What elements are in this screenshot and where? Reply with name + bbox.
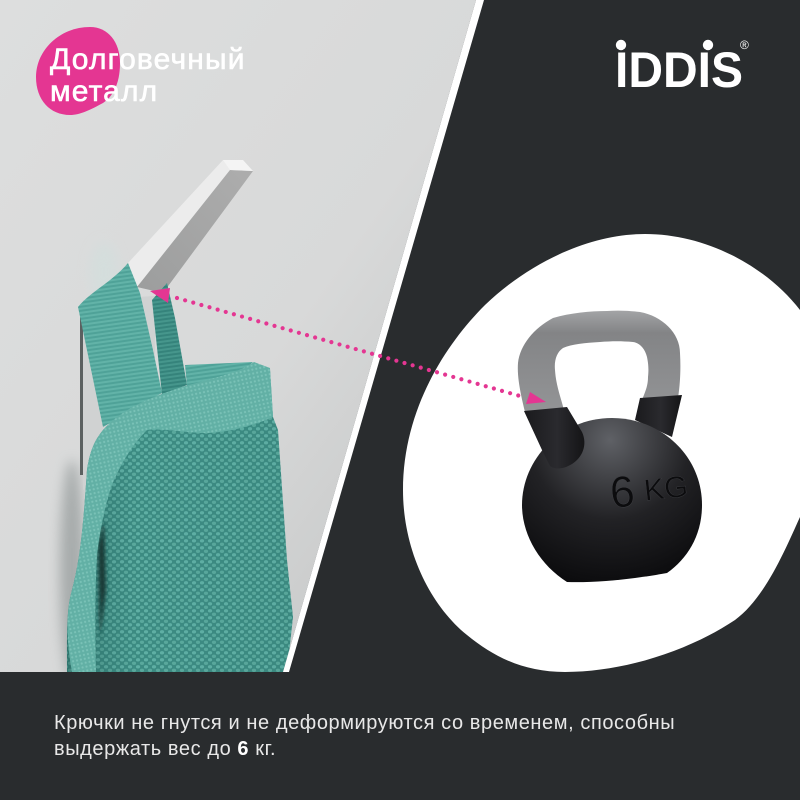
hook arm [128, 160, 253, 293]
kettlebell left sleeve [524, 407, 584, 468]
kettlebell right sleeve [635, 395, 682, 437]
description text: выдержать вес до 6 кг. [54, 738, 276, 760]
kettlebell ball [522, 418, 702, 582]
heading: Долговечный [50, 43, 246, 76]
icon: kettlebell [518, 311, 702, 582]
white blob behind kettlebell [403, 234, 800, 672]
towel back strap [152, 283, 187, 395]
towel inner rim [185, 362, 253, 386]
heading [50, 43, 246, 108]
description text: Крючки не гнутся и не деформируются со временем, способны [54, 712, 675, 734]
arrow: dotted double-headed pointer [150, 288, 546, 404]
white diagonal stripe [283, 0, 484, 672]
kettlebell weight label: 6 [608, 467, 637, 518]
dark gap inside towel fold [98, 520, 106, 640]
towel front strap [78, 263, 162, 427]
towel body [67, 362, 293, 672]
heading: металл [50, 75, 158, 108]
description text [54, 712, 675, 760]
panel: photo of hook on wall [0, 0, 476, 680]
towel top hem [68, 362, 273, 672]
pink blob behind heading [36, 27, 120, 115]
kettlebell handle [518, 311, 680, 412]
hook mounting plate [80, 296, 155, 490]
logo: IDDIS: IDDIS [615, 42, 743, 98]
kettlebell weight label: KG [642, 470, 690, 508]
kettlebell weight label [608, 461, 690, 518]
logo: IDDIS: ® [740, 38, 749, 52]
